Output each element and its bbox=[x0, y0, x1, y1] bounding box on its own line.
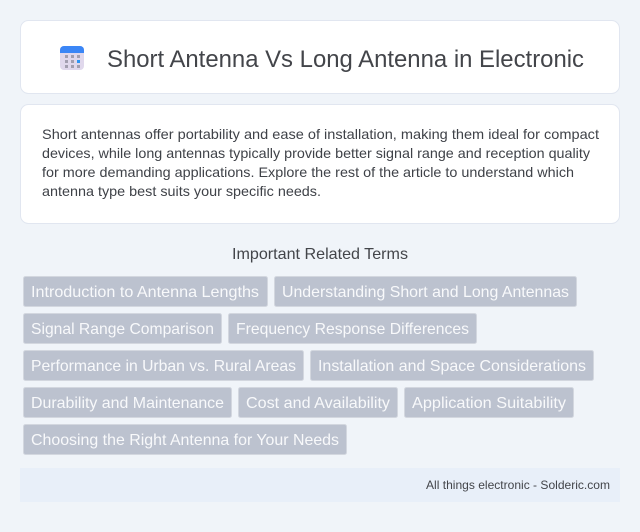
tag bbox=[238, 388, 398, 418]
tag: Frequency Response Differences bbox=[236, 321, 469, 338]
tag bbox=[274, 276, 576, 306]
title: Short Antenna Vs Long Antenna in Electronic bbox=[107, 46, 584, 73]
text block: introduction: devices, while long antennas typically provide better signal range and reception quality bbox=[42, 145, 590, 161]
tag bbox=[24, 314, 222, 344]
tag: Application Suitability bbox=[412, 395, 566, 412]
tag bbox=[24, 276, 268, 306]
icon: calendar bbox=[60, 46, 84, 70]
text block: introduction bbox=[42, 126, 599, 199]
tag bbox=[24, 350, 304, 380]
panel: title header bbox=[20, 20, 620, 94]
tag: Signal Range Comparison bbox=[31, 321, 214, 338]
tag: Installation and Space Considerations bbox=[318, 358, 586, 375]
tag bbox=[24, 424, 346, 454]
tag: Understanding Short and Long Antennas bbox=[282, 284, 569, 301]
tag bbox=[310, 350, 594, 380]
tag: Choosing the Right Antenna for Your Needs bbox=[31, 432, 339, 449]
tag bbox=[24, 388, 232, 418]
text block: introduction: for more demanding applications. Explore the rest of the article to understand which bbox=[42, 164, 574, 180]
tags: related terms bbox=[24, 276, 594, 454]
footer bbox=[20, 468, 620, 502]
tag: Performance in Urban vs. Rural Areas bbox=[31, 358, 296, 375]
text block: introduction: antenna type best suits your specific needs. bbox=[42, 183, 321, 199]
text block: introduction: Short antennas offer portability and ease of installation, making them ideal for compact bbox=[42, 126, 599, 142]
tag bbox=[404, 388, 574, 418]
footer: All things electronic - Solderic.com bbox=[426, 478, 610, 492]
heading: important related terms: Important Related Terms bbox=[232, 246, 408, 263]
tag: Durability and Maintenance bbox=[31, 395, 224, 412]
tag: Cost and Availability bbox=[246, 395, 390, 412]
panel: introduction bbox=[20, 104, 620, 224]
tag bbox=[228, 314, 476, 344]
tag: Introduction to Antenna Lengths bbox=[31, 284, 259, 301]
